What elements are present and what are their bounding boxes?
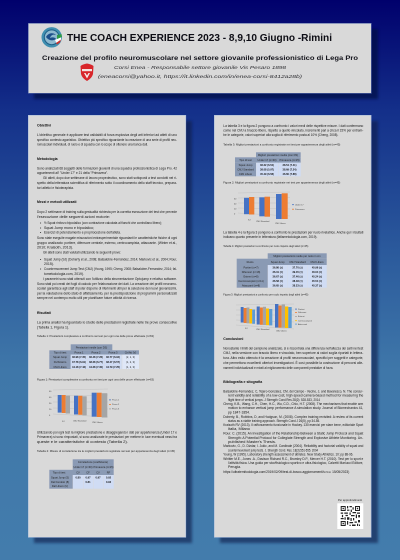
text block: mezzi e metodi: • <box>40 221 42 225</box>
table 3: 38.08 (5.97) <box>260 168 274 172</box>
text block: bibliografia: Kraisoth RV (2013). Il rafforzamento funzionale in Hockey. 130 esercizi per stare bene, editoriale Sport <box>223 423 363 427</box>
table 4: 36.31 (±) <box>273 270 283 274</box>
text block: bibliografia: Whitter M.E., Jones .A., Davison Richard R.C., Bromley D.P., Mercer H.T. (2010). Test per lo sport e <box>223 457 363 461</box>
caption: tabella 1: Tabella 1: Prestazioni complessive a confronto nei test per ogni una delle prove effettuate (n=63) <box>37 334 154 338</box>
table 4 <box>237 253 327 288</box>
table 4: 39.45 (±) <box>292 270 303 274</box>
author: Corsi Enea - Responsabile settore giovanile Vis Pesaro 1898 <box>114 65 286 71</box>
table 1: Prova 1 <box>75 350 84 354</box>
text block: bibliografia: Cheng, K.B., Wang, C.H., Chen, H.C., Wu, C.D., Chiu, H.T. (2008). The mechanisms that enable arm <box>223 402 363 406</box>
table 2: Correlazione (coefficiente) <box>78 460 108 464</box>
table 4: Difensori (n=18) <box>242 270 260 274</box>
caption: tabella 2: Tabella 2: Misure di correlazione tra le migliori prestazioni registrate nei test per appartenenza degli atleti (n=45) <box>37 449 175 453</box>
caption: tabella 3: Tabella 3: Migliori prestazioni a confronto registrate nei test per appartenenza degli atleti (n=45) <box>223 142 340 146</box>
table 2: 0.93 <box>106 480 112 484</box>
text block: mezzi e metodi: tometodologia.com, 2019). <box>44 272 84 276</box>
text block: bibliografia: rent validity and reliability of a low-cost, high-speed camera-based method for measuring the <box>228 394 363 398</box>
table 1: (1, 2, 3) <box>126 365 135 369</box>
chart: figura 3: Difensori <box>298 311 307 314</box>
table 1: 38.28 (6.77) <box>89 360 103 364</box>
chart: figura 2: 40 <box>234 204 237 206</box>
text block: conclusioni: che permettono eccellenti ulteriori investigazioni. È così possibile la costruzione di percorsi alle- <box>223 360 364 365</box>
chart: figura 1: 40 <box>49 397 52 399</box>
chart: figura 3: CMJ Libero <box>276 330 287 332</box>
table 3: Primavera (n=15) <box>279 158 300 162</box>
text block: utilizzando <box>37 430 177 444</box>
text block: tabella 3 intro <box>223 124 364 137</box>
table 4: 45.96 (±) <box>312 266 322 270</box>
chart: figura 3: CMJ Standard <box>256 328 270 331</box>
table 3: 38.69 (7.24) <box>282 168 297 172</box>
table 1: Tipo di test <box>54 350 67 354</box>
text block: metodologia: appartenenti all' "Under 17" e 21 della "Primavera". <box>37 171 108 175</box>
table 1: 36.48 (7.26) <box>89 355 103 359</box>
icon: vis pesaro shield <box>80 64 94 81</box>
table 2: RF <box>107 470 111 474</box>
table 4: 36.86 (±) <box>273 266 283 270</box>
text block: conclusioni: tura. Altro esito ottenuto è la creazione di profili neuromuscolari, specifici per soggetti e categorie, <box>223 356 363 360</box>
table 3: CMJ Libero <box>239 172 253 176</box>
text block: tabella 4 intro: indicano quanto presente in letteratura (fatlametodologia.com, 2019). <box>223 235 317 239</box>
text block: mezzi e metodi: l'esecuzione delle seguenti azioni motorie: <box>37 215 110 219</box>
title: THE COACH EXPERIENCE 2023 - 8,9,10 Giugno -Rimini <box>67 33 332 44</box>
chart: figura 1: 0 <box>49 415 51 417</box>
text block: mezzi e metodi: Squat Jump mono e bipodalico; <box>44 226 94 230</box>
text block: mezzi e metodi: Squat Jump (SJ) (Doherty et al., 2008; Balsalobre-Fernández, 2014; Markovic et al., 2004; Rour, <box>44 258 177 262</box>
table 4: 46.04 (±) <box>312 270 322 274</box>
chart: figura 1: Prova 2 <box>112 403 120 406</box>
author <box>98 65 303 80</box>
table 2: CF <box>86 470 90 474</box>
table 4: CMJ Standard <box>289 260 306 264</box>
text block: risultati: (Tabella 1, Figura 1). <box>37 326 69 330</box>
text block: bibliografia: https://ultratemitodologia.com/2019/02/09/test-di-bosco-aggiornamenti/u.v.u. 15/05/2023) <box>223 470 349 474</box>
text block: bibliografia: Bibliografia e sitografia <box>223 380 262 384</box>
chart: figura 3: Portieri <box>298 308 305 311</box>
text block: risultati: La prima analisi ha riguardato lo studio delle prestazioni registrate nelle tre prove consecutive <box>37 320 177 324</box>
text block: mezzi e metodi: per la valutazione dello stato di affaticamento, per la predisposizione di programmi personalizzati <box>37 292 177 296</box>
text block: mezzi e metodi: • <box>40 230 42 234</box>
chart: figura 3: SJ <box>245 328 247 330</box>
chart: figura 2: CMJ Libero <box>275 222 286 225</box>
subtitle: Creazione del profilo neuromuscolare nel settore giovanile professionistico di Lega Pro <box>42 55 358 62</box>
table 1: 36.98 (7.35) <box>72 355 86 359</box>
table 1: Cir/Att (V) <box>125 350 136 354</box>
table 4: 38.23 (±) <box>292 284 303 288</box>
text block: tabella 4 intro: La tabella 4 e la figura 3 pongono a confronto le prestazioni per ruolo rivelatrice. Anche qui i risultati <box>223 230 363 234</box>
text block: bibliografia: status as a viable training approach. Strength Cond J 26(5), pp 34-55. <box>228 419 320 423</box>
text block: metodologia: Gli atleti, dopo due settimane di lavoro propedeutico, sono stati sottoposti a test condotti nel ri- <box>43 176 178 180</box>
table 1: Squat Jump <box>53 355 67 359</box>
table 1: 36.77 (6.94) <box>106 355 120 359</box>
text block: risultati <box>37 311 177 330</box>
text block: conclusioni <box>223 337 364 370</box>
text block: bibliografia: Italia, Milano <box>228 427 250 431</box>
chart: figura 2 <box>234 192 305 225</box>
text block: mezzi e metodi: 2015). <box>44 262 54 266</box>
chart: figura 1 <box>49 389 120 424</box>
table 4: Portieri (n=7) <box>243 266 259 270</box>
table 3: 38.54 (7.41) <box>282 163 297 167</box>
table 1: 37.78 (6.91) <box>72 360 86 364</box>
table 2: Squat Jump (S) <box>51 476 69 480</box>
text block: tabella 3 intro: La tabella 3 e la figura 2 pongono a confronto i valori medi delle rispettive misure. I dati confermano <box>223 124 363 128</box>
table 3: Under 17 (n=30) <box>258 158 277 162</box>
table 1: 38.47 (6.57) <box>106 360 120 364</box>
text block: bibliografia <box>223 380 364 474</box>
table 3: Migliori prestazioni medie (con DS) <box>258 153 298 157</box>
table 1: 44.28 (7.30) <box>89 365 103 369</box>
table 2: 0.97 <box>85 476 91 480</box>
table 4: 37.46 (±) <box>292 274 303 278</box>
table 4: Migliori prestazioni medie per ruolo in cm <box>273 254 321 258</box>
text block: bibliografia: Young, W (1995). Laboratory strength assessment of athletes. New Study Athletics. 10: pp 88-96. <box>223 452 353 456</box>
text block: bibliografia: Perugia. <box>228 465 241 469</box>
text block: mezzi e metodi: • <box>40 267 42 271</box>
text block: metodologia: Metodologia <box>37 157 58 161</box>
table 4: 36.65 (±) <box>273 284 283 288</box>
text block: bibliografia: Strength: A Potential Protocol for Collegiate Strength and Explosive Athlete Monitoring. Un- <box>228 436 364 440</box>
text block: tabella 4 intro <box>223 230 363 239</box>
chart: figura 1: 30 <box>49 403 52 405</box>
table 2: CV <box>76 470 80 474</box>
text block: obiettivi: romuscolari individuali, di ruolo e di squadra con lo scopo di ottenere una banca dati. <box>37 142 148 146</box>
text block: mezzi e metodi: Mezzi e metodi utilizzati <box>37 200 77 204</box>
icon: coach experience logo <box>42 27 62 48</box>
table 3: CMJ Standard <box>237 168 254 172</box>
table 4: 36.67 (±) <box>273 274 283 278</box>
text block: bibliografia: published Master's Thesis. <box>228 440 276 444</box>
text block: metodologia: spetto della letteratura scientifica di riferimento sotto il coordinamento dello staff tecnico, prepara- <box>37 181 178 185</box>
author: (eneacorsi@yahoo.it, https://it.linkedin.com/in/enea-corsi-8412a28b) <box>98 74 303 80</box>
label: per approfondimenti: Per approfondimenti <box>338 498 362 502</box>
text block: bibliografia: flight time of vertical jumps. J Strength Cond Res 28(2): 528-533, 2014 <box>228 398 320 402</box>
table 3: 45.49 (6.58) <box>260 172 274 176</box>
table 4: 38.48 (±) <box>292 279 303 283</box>
panel: left column <box>28 115 192 543</box>
table 4: Esterni (n=8) <box>244 274 259 278</box>
text block: conclusioni: CMJ, nella versione con braccio libero e vincolato, ben superiore ai valori soglia riportati in lettera- <box>223 351 364 355</box>
table 3: Tipo di test <box>239 158 252 162</box>
chart: figura 3 <box>236 304 312 332</box>
text block: mezzi e metodi: sempre nel contempo molto utili per pianificare future attività di ricerca. <box>37 296 137 300</box>
text block: bibliografia: Markovic, G., D. Dizdar, I. Jukic, and M. Cardinale (2004). Reliability and factorial validity of squat and <box>223 444 363 448</box>
text block: mezzi e metodi: Gli atleti sono stati valutati utilizzando le seguenti prove: <box>43 250 121 254</box>
table 4: CMJ Libero <box>310 260 324 264</box>
panel: right column <box>214 115 378 543</box>
chart: figura 1: CMJ Standard <box>73 420 87 422</box>
chart: figura 2: 60 <box>234 198 237 200</box>
chart: figura 3: Centrocampisti <box>298 320 312 322</box>
table 1: 44.79 (7.25) <box>106 365 120 369</box>
text block: bibliografia: Doherty, B., Robbins, D, and Hodgson, M. (2008). Complex training revisited: A review of its current <box>223 415 363 419</box>
chart: figura 1: CMJ Libero <box>92 421 103 424</box>
text block: bibliografia: motion to enhance vertical jump performance A simulation study. Journal of Biomechanics 41, <box>228 406 363 410</box>
chart: figura 2: CMJ Standard <box>256 220 270 223</box>
chart: figura 1: SJ <box>62 421 64 423</box>
chart: figura 2: 0 <box>234 214 236 216</box>
table 4: 45.24 (±) <box>312 274 322 278</box>
table 4: 36.58 (±) <box>273 279 283 283</box>
chart: figura 1: Prova 3 <box>112 408 120 411</box>
table 2: 0.80 <box>75 476 81 480</box>
text block: mezzi e metodi: Esercizi di potenziamento e propriocezione dell'atleta. <box>44 230 121 234</box>
chart: figura 2: Primavera <box>295 208 305 211</box>
table 3: 46.60 (7.88) <box>282 172 297 176</box>
chart: figura 1: 20 <box>49 409 52 411</box>
text block: utilizzando: Primavera) si sono rimpostati, si sono analizzate le prestazioni per mettere in luce eventuali nessi tra <box>37 435 177 439</box>
text block: mezzi e metodi <box>37 200 178 300</box>
table 4: 37.70 (±) <box>292 266 303 270</box>
text block: conclusioni: Conclusioni <box>223 337 243 341</box>
table 2: 0.97 <box>95 476 101 480</box>
chart: figura 2: Under 17 <box>295 204 304 206</box>
panel: header <box>28 23 378 99</box>
table 1: (2, 1, 3) <box>126 355 135 359</box>
text block: mezzi e metodi: gruppo analizzato: portiere, difensore centrale, esterno, centrocampista, attaccante. (Winter et al., <box>37 241 177 245</box>
table 3: 36.22 (6.54) <box>260 163 274 167</box>
table 2: Dal Fondoto (8) <box>51 480 69 484</box>
text block: mezzi e metodi: Dopo 2 settimane di training sulla gestualità richiesta per la corretta esecuzione dei test che prevede <box>37 210 177 214</box>
text block: conclusioni: namenti individualizzati e mirati al miglioramento delle componenti prestative di forza. <box>223 366 333 370</box>
table 1: Dx/Sinistro <box>54 360 67 364</box>
table 3 <box>235 152 301 176</box>
chart: figura 2: 20 <box>234 208 237 210</box>
text block: metodologia <box>37 157 178 190</box>
table 1: Prova 2 <box>92 350 101 354</box>
table 1: (1, 2, 3) <box>126 360 135 364</box>
caption: figura 2: Figura 2: Migliori prestazioni a confronto registrate nei test per appartenenza degli atleti (n=45) <box>223 180 340 184</box>
chart: figura 2: SJ <box>248 220 250 222</box>
chart: figura 3: Attaccanti <box>298 323 308 326</box>
text block: tabella 3 intro: be le categorie, valori superiori alla soglia di riferimento posta al 10% (Cheng, 2008). <box>223 133 338 137</box>
text block: obiettivi: L'obiettivo generale è applicare test validabili di forza esplosiva degli arti inferiori ad atleti di uno <box>37 133 177 137</box>
text block: mezzi e metodi: Sono stati poi creati dei fogli di calcolo per l'elaborazione dei dati. La creazione dei profili neuromu- <box>37 282 178 286</box>
text block: utilizzando: Utilizzando poi ogni test la migliore prestazione e disaggregando i dati per appartenenza (Under 17 e <box>37 430 177 434</box>
table 4: Attaccanti (n=8) <box>242 284 260 288</box>
table 1 <box>49 344 139 369</box>
text block: mezzi e metodi: I parametri sono stati ottenuti con l'utilizzo della strumentazione Optojump e relativo software. <box>43 277 177 281</box>
table 2: Tipo di test <box>53 470 66 474</box>
table 1: Prova 3 <box>109 350 118 354</box>
text block: conclusioni: Nonostante i limiti del campione analizzato, si è riscontrata una differenza nell'altezza dei salti nel test <box>223 346 363 350</box>
text block: mezzi e metodi: Countermovement Jump Test (CMJ) (Young, 1995; Cheng, 2008; Balsalobre-Fernandez, 2014; fal- <box>44 267 178 271</box>
text block: mezzi e metodi: scolari garantisce agli staff di poter disporre di riferimenti utili per la selezione dei nuovi giovanissimi, <box>37 286 177 290</box>
text block: mezzi e metodi: ½ Squat rinforzo bipodalico (con contrazione calcolata al fianchi che controllano libero); <box>44 221 162 225</box>
text block: metodologia: tori atletici e fisioterapista. <box>37 186 74 190</box>
text block: mezzi e metodi: • <box>40 226 42 230</box>
text block: utilizzando: queste e le caratteristiche di contesto (Tabella 2). <box>37 440 128 444</box>
text block: risultati: Risultati <box>37 311 51 315</box>
table 1: CMJ Libero <box>53 365 67 369</box>
text block: mezzi e metodi: 2010; Kraisoth, 2013). <box>37 246 73 250</box>
table 1: Prestazioni medie (con DS) <box>76 345 107 349</box>
table 2: Primavera (n=15) <box>93 465 114 469</box>
text block: bibliografia: Rour. C. (2015). An Investigation of the Relationship Between a Static Jump Protocol and Squat <box>223 432 363 436</box>
table 2: Dal Libero (U) <box>52 484 68 488</box>
table 4: 45.37 (±) <box>312 284 322 288</box>
text block: bibliografia: l'attività fisica. Una guida per stor/fisiologico sportivo e ultra-fisiologico, Calzetti Mariucci Editore, <box>228 461 363 465</box>
table 3: Squat Jump <box>239 163 253 167</box>
text block: tabella 3 intro: come nel CMJ a braccio libero, rispetto a quello vincolato, incrementi pari a circa il 15% per entram- <box>223 128 364 132</box>
table 4: 45.54 (±) <box>312 279 322 283</box>
table 2: 0.92 <box>106 476 112 480</box>
text block: mezzi e metodi: Sono state eseguite magate misurazioni extrasperimentale riguardanti le caratteristiche fisiche di ogni <box>37 236 177 240</box>
table 4: Squat Jump <box>271 260 285 264</box>
chart: figura 3: Esterni <box>298 315 305 318</box>
table 2 <box>49 459 114 489</box>
chart: figura 1: Prova 1 <box>112 399 120 402</box>
icon: QR code <box>337 503 363 529</box>
table 4: Ruolo <box>247 260 254 264</box>
text block: obiettivi: specifico contesto agonistico. Obiettivo più specifico riguardante la creazione di una serie di profili neu- <box>37 138 178 142</box>
table 2: CV <box>96 470 100 474</box>
table 4: Centrocampisti (n=11) <box>238 279 264 283</box>
text block: metodologia: Sono analizzati 68 soggetti delle formazioni giovanili di una squadra professionistica di Lega Pro. 42 <box>37 166 177 170</box>
table 2: 0.81 <box>85 480 91 484</box>
caption: figura 3: Figura 3: Migliori prestazioni a confronto per ruolo rispetto degli atleti (n=45) <box>223 293 308 297</box>
text block: obiettivi <box>37 124 178 146</box>
table 2: Under 17 (n=30) <box>74 465 93 469</box>
text block: mezzi e metodi: • <box>40 258 42 262</box>
caption: figura 1: Figura 1: Prestazioni complessive a confronto nei test per ogni una delle prove effettuate (n=63) <box>37 378 154 382</box>
text block: bibliografia: countermovement jump tests. J. Strength Cond. Res. 18(3):551-555. 2004 <box>228 448 318 452</box>
table 1: 44.18 (7.42) <box>72 365 86 369</box>
chart: figura 1: 60 <box>49 391 52 393</box>
text block: bibliografia: Balsalobre-Fernandez, C, Tejero-Gonzalez, CM, del Campo - Vecino, J, and Bavaresco, N. The concur- <box>223 390 364 394</box>
caption: tabella 4: Tabella 4: Migliori prestazioni a confronto per ruolo rispetto degli atleti (n=45) <box>223 244 308 248</box>
text block: obiettivi: Obiettivi <box>37 124 51 128</box>
text block: bibliografia: pp 1847-1854. <box>228 410 250 414</box>
